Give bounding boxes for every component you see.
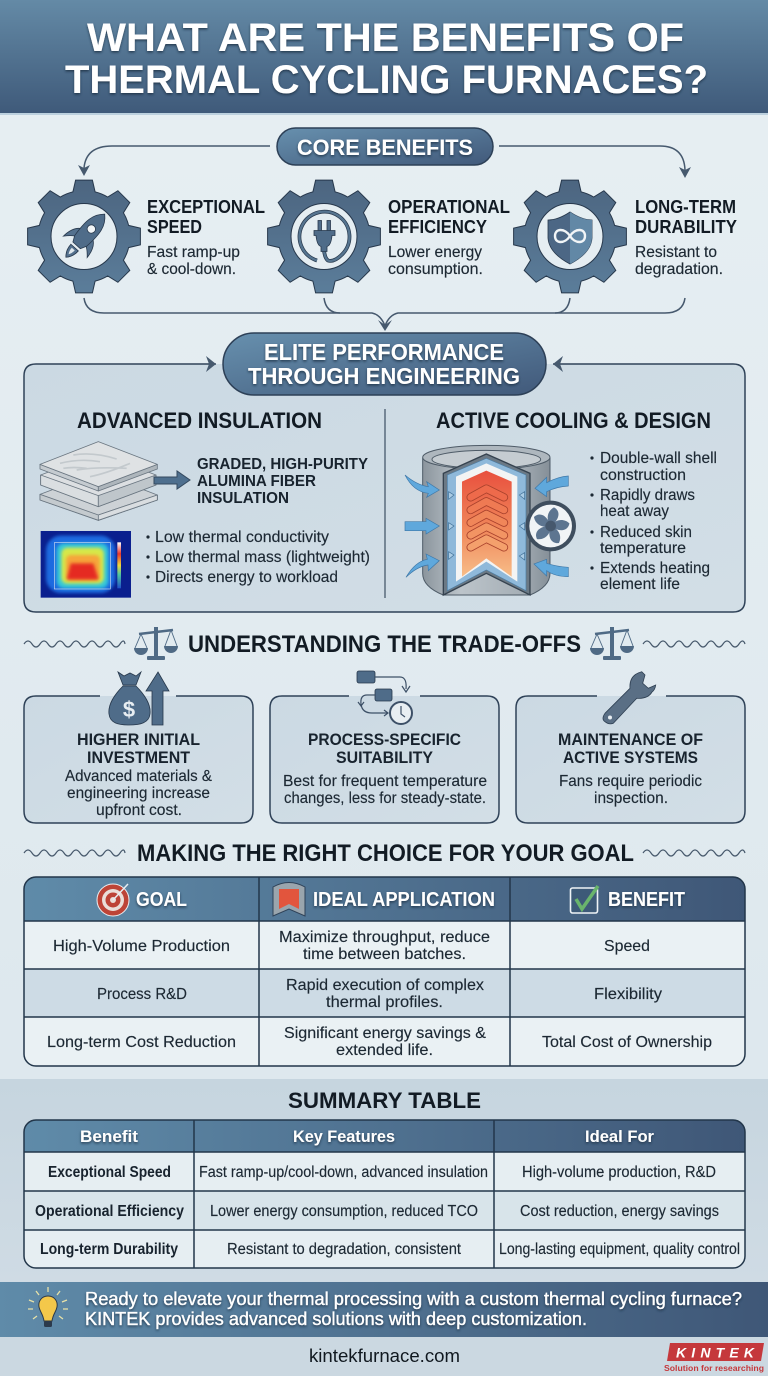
card: process-specific suitability: [270, 671, 499, 823]
list: cooling features: Rapidly draws: [600, 487, 695, 504]
text: operational efficiency: consumption.: [388, 261, 483, 278]
row: process R&D: Rapid execution of complex: [286, 977, 484, 994]
call to action text: Ready to elevate your thermal processing with a custom thermal cycling furnace?: [85, 1289, 742, 1309]
furnace body: [423, 445, 550, 595]
card text: Advanced materials &: [65, 768, 212, 785]
icon: rocket gear: [28, 180, 140, 293]
card text: inspection.: [594, 790, 668, 807]
card text: HIGHER INITIAL: [77, 731, 200, 749]
call to action text: [85, 1289, 742, 1329]
website url: kintekfurnace.com: [309, 1346, 460, 1366]
list: cooling features: element life: [600, 576, 680, 593]
list: insulation properties: Low thermal mass (lightweight): [155, 549, 370, 566]
icon: small furnace: [273, 882, 305, 916]
call to action text: KINTEK provides advanced solutions with deep customization.: [85, 1309, 587, 1329]
elite performance heading pill: ELITE PERFORMANCE: [264, 339, 504, 365]
title banner: THERMAL CYCLING FURNACES?: [65, 58, 708, 102]
icon: insulation layers: [40, 442, 157, 520]
table: goals: IDEAL APPLICATION: [313, 889, 495, 911]
text: exceptional speed: EXCEPTIONAL: [147, 197, 265, 217]
logo: KINTEK: [664, 1343, 764, 1373]
list: insulation properties: Low thermal conductivity: [155, 529, 329, 546]
list: cooling features: Reduced skin: [600, 524, 692, 541]
card: higher initial investment: [24, 672, 253, 823]
icon: plug gear: [268, 180, 380, 293]
row: long-term cost reduction: [47, 1025, 712, 1059]
table: summary: [24, 1120, 745, 1268]
row: process R&D: Process R&D: [97, 986, 187, 1003]
core benefits heading pill: CORE BENEFITS: [297, 135, 473, 160]
text: exceptional speed: & cool-down.: [147, 261, 236, 278]
card text: Fans require periodic: [559, 773, 702, 790]
arrows from core benefits to gears: [78, 146, 691, 178]
summary row: operational efficiency: Operational Efficiency: [35, 1203, 184, 1220]
panel: summary band: [0, 1079, 768, 1282]
icon: light bulb: [28, 1287, 68, 1327]
row: high-volume production: [53, 929, 650, 963]
summary row: operational efficiency: Cost reduction, energy savings: [520, 1203, 719, 1220]
list: cooling features: Double-wall shell: [600, 450, 717, 467]
text: operational efficiency: [388, 197, 510, 278]
row: high-volume production: Speed: [604, 938, 650, 955]
card text: engineering increase: [67, 785, 210, 802]
text: alumina fiber insulation: [197, 456, 369, 507]
row: process R&D: thermal profiles.: [326, 994, 443, 1011]
text: exceptional speed: [147, 197, 265, 278]
list: cooling features: [590, 450, 717, 593]
text: exceptional speed: Fast ramp-up: [147, 244, 240, 261]
elite performance heading pill: THROUGH ENGINEERING: [248, 363, 520, 389]
cooling fan: [525, 501, 576, 551]
card text: changes, less for steady-state.: [284, 790, 486, 807]
heading: active cooling and design: ACTIVE COOLING & DESIGN: [436, 408, 711, 433]
summary row: operational efficiency: [35, 1203, 719, 1220]
card text: [65, 731, 212, 819]
text: long-term durability: [635, 197, 737, 278]
card text: PROCESS-SPECIFIC: [308, 731, 461, 749]
icon: thermal heat map: [41, 531, 131, 598]
icon: process flow with clock: [357, 671, 412, 724]
list: cooling features: construction: [600, 467, 686, 484]
row: high-volume production: time between batches.: [303, 946, 466, 963]
summary row: exceptional speed: [48, 1164, 716, 1181]
row: high-volume production: Maximize throughput, reduce: [279, 929, 490, 946]
list: insulation properties: [146, 529, 370, 586]
logo: KINTEK: KINTEK: [676, 1344, 755, 1360]
text: long-term durability: degradation.: [635, 261, 723, 278]
summary row: long-term durability: Long-term Durability: [40, 1241, 178, 1258]
card: maintenance of active systems: [516, 672, 745, 823]
summary row: long-term durability: Long-lasting equipment, quality control: [499, 1241, 740, 1258]
summary header row: Key Features: [293, 1128, 395, 1146]
row: long-term cost reduction: Total Cost of Ownership: [542, 1034, 712, 1051]
panel: elite performance through engineering: [24, 333, 745, 612]
card text: upfront cost.: [96, 802, 182, 819]
benefit: long-term durability: [514, 180, 737, 293]
row: long-term cost reduction: Significant energy savings &: [284, 1025, 486, 1042]
core benefits heading pill: [277, 128, 493, 165]
text: alumina fiber insulation: GRADED, HIGH-PURITY: [197, 456, 369, 473]
title banner: [0, 0, 768, 115]
list: cooling features: temperature: [600, 540, 686, 557]
card text: [558, 731, 703, 807]
icon: balance scale right: [590, 627, 634, 660]
row: process R&D: Flexibility: [594, 986, 662, 1003]
section heading: understanding the trade-offs: UNDERSTANDING THE TRADE-OFFS: [188, 631, 581, 658]
footer strip: [0, 1337, 768, 1376]
text: operational efficiency: EFFICIENCY: [388, 217, 487, 237]
logo: KINTEK: Solution for researching: [664, 1364, 764, 1373]
summary header row: Benefit: [80, 1128, 139, 1146]
list: insulation properties: Directs energy to workload: [155, 569, 338, 586]
summary row: exceptional speed: High-volume production, R&D: [522, 1164, 716, 1181]
cooling airflow arrows: [405, 475, 568, 577]
summary row: exceptional speed: Fast ramp-up/cool-down, advanced insulation: [199, 1164, 488, 1181]
icon: money bag and up arrow: $: [123, 697, 135, 722]
card text: ACTIVE SYSTEMS: [563, 749, 698, 767]
benefit: exceptional speed: [28, 180, 265, 293]
text: operational efficiency: Lower energy: [388, 244, 482, 261]
row: long-term cost reduction: Long-term Cost Reduction: [47, 1034, 236, 1051]
arrow: layers to label: [154, 471, 190, 489]
summary header row: [80, 1128, 655, 1146]
illustration: furnace cutaway with fan: [405, 445, 576, 595]
heading: advanced insulation: ADVANCED INSULATION: [77, 408, 322, 433]
heading: summary table: SUMMARY TABLE: [288, 1088, 481, 1113]
icon: money bag and up arrow: [109, 672, 169, 725]
icon: target: [97, 884, 129, 916]
text: long-term durability: Resistant to: [635, 244, 717, 261]
table: goals: [24, 877, 745, 1066]
card text: INVESTMENT: [87, 749, 190, 767]
summary row: operational efficiency: Lower energy consumption, reduced TCO: [210, 1203, 478, 1220]
text: long-term durability: DURABILITY: [635, 217, 737, 237]
summary header row: Ideal For: [585, 1128, 655, 1146]
summary row: long-term durability: Resistant to degradation, consistent: [227, 1241, 462, 1258]
icon: wrench: [603, 672, 656, 724]
icon: balance scale left: [134, 627, 178, 660]
section heading: making the right choice: MAKING THE RIGHT CHOICE FOR YOUR GOAL: [137, 840, 634, 867]
icon: checkbox: [570, 886, 598, 913]
row: long-term cost reduction: extended life.: [336, 1042, 433, 1059]
summary row: long-term durability: [40, 1241, 740, 1258]
card text: SUITABILITY: [336, 749, 433, 767]
row: process R&D: [97, 977, 662, 1011]
summary row: exceptional speed: Exceptional Speed: [48, 1164, 171, 1181]
card text: [283, 731, 487, 807]
text: alumina fiber insulation: INSULATION: [197, 490, 289, 507]
text: exceptional speed: SPEED: [147, 217, 202, 237]
call to action banner: [0, 1282, 768, 1337]
text: alumina fiber insulation: ALUMINA FIBER: [197, 473, 316, 490]
list: cooling features: Extends heating: [600, 560, 710, 577]
table: goals: BENEFIT: [608, 889, 685, 911]
title banner: WHAT ARE THE BENEFITS OF: [87, 16, 684, 60]
icon: shield gear: [514, 180, 626, 293]
arrows converging to elite performance: [84, 298, 685, 331]
text: operational efficiency: OPERATIONAL: [388, 197, 510, 217]
section heading: understanding the trade-offs: [24, 627, 745, 660]
row: high-volume production: High-Volume Production: [53, 938, 230, 955]
text: long-term durability: LONG-TERM: [635, 197, 736, 217]
elite performance heading pill: [223, 333, 546, 395]
table: goals: GOAL: [136, 889, 187, 911]
card text: MAINTENANCE OF: [558, 731, 703, 749]
card text: Best for frequent temperature: [283, 773, 487, 790]
list: cooling features: heat away: [600, 503, 669, 520]
benefit: operational efficiency: [268, 180, 510, 293]
